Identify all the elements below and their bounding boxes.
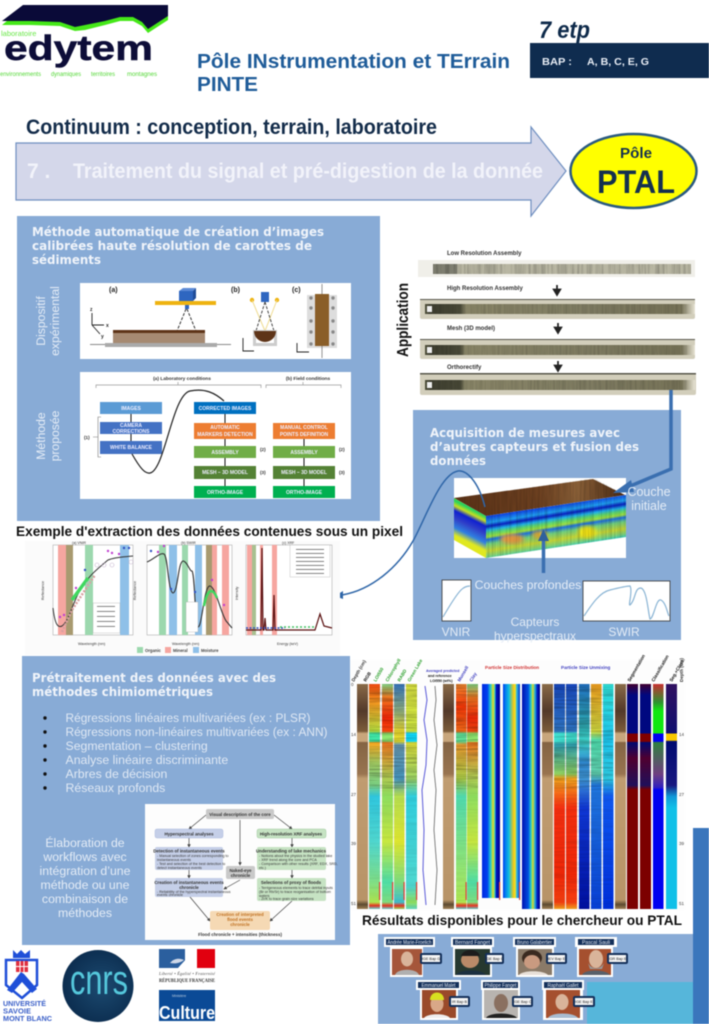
image: hyperspectral block: [454, 478, 626, 558]
chart: SWIR spectrum: Wavelength (nm): [172, 642, 199, 646]
log headers: Averaged predicted: [426, 669, 459, 673]
person 4: IGR Bap E: [608, 957, 627, 961]
label: couche initiale: [627, 485, 671, 513]
log headers: Seg.+Class.: [669, 658, 686, 682]
logo: edytem: laboratoire: [1, 29, 36, 38]
person 7: Raphaël Gallet: [548, 983, 579, 989]
depth ticks: 51: [351, 901, 357, 906]
legend: band types: [137, 647, 219, 653]
diagram: workflow: (3): [339, 470, 345, 475]
person 5: Emmanuel Malet: [422, 983, 456, 989]
diagram: workflow: IMAGES: [121, 406, 142, 412]
arrow: to deep layers: [538, 529, 549, 573]
depth ticks: 39: [679, 841, 685, 846]
log headers: and reference: [428, 674, 452, 678]
diagram: flood chronicle workflow: instantaneous events: [157, 858, 191, 862]
text: workflows: méthodes: [58, 906, 112, 920]
panel heading: [430, 426, 639, 468]
arrow: step banner: Traitement du signal et pré-digestion de la donnée: [73, 160, 543, 183]
logo: edytem: territoires: [91, 71, 116, 78]
logo: ministere de la culture: [159, 990, 215, 1023]
diagram: experimental setup: [80, 283, 351, 359]
depth ticks: [351, 682, 685, 906]
list: methods: Régressions non-linéaires multivariées (ex : ANN): [66, 725, 328, 739]
diagram: flood chronicle workflow: chronicle: [231, 873, 251, 878]
chart: SWIR: [583, 581, 670, 639]
diagram: flood chronicle workflow: events chronicle: [157, 893, 183, 897]
diagram: flood chronicle workflow: - Comparison with other results (XRF, EDX, SRD,: [259, 862, 338, 866]
diagram: workflow: CAMERA: [120, 423, 142, 429]
diagram: experimental setup: (a): [109, 287, 118, 294]
chart: SWIR spectrum: [133, 541, 232, 646]
log headers: RABD: [397, 668, 408, 682]
label: capteurs hyperspectraux: Capteurs: [511, 615, 559, 629]
chart: SWIR spectrum: (b) SWIR: [181, 541, 196, 545]
list: methods: Arbres de décision: [66, 767, 168, 781]
classification maps: [627, 684, 677, 909]
log headers: Chlorophyll: [385, 658, 402, 682]
list: methods: Segmentation – clustering: [66, 739, 208, 753]
panel: methode automatique: [17, 216, 380, 521]
BAP banner: A, B, C, E, G: [587, 56, 649, 68]
diagram: flood chronicle workflow: - Test and selection of the best detection to: [157, 862, 225, 866]
person 5: [416, 980, 470, 1020]
diagram: workflow: MARKERS DETECTION: [197, 432, 253, 438]
diagram: experimental setup: z: [90, 307, 93, 313]
panel heading: Prétraitement des données avec des: [32, 671, 276, 685]
diagram: flood chronicle workflow: - XRF trend along the core and PCA: [259, 858, 317, 862]
log headers: Particle Size Unmixing: [561, 665, 610, 670]
depth ticks: 14: [679, 732, 685, 737]
label: application: Application: [395, 283, 412, 357]
log headers: Munsell: [457, 665, 469, 682]
person 2: [451, 937, 504, 977]
panel heading: [32, 671, 276, 699]
chart: XRF spectrum: (c) XRF: [282, 541, 295, 545]
diagram: flood chronicle workflow: Hyperspectral analyses: [164, 832, 214, 836]
diagram: workflow: ORTHO-IMAGE: [286, 490, 323, 496]
diagram: workflow: ASSEMBLY: [211, 450, 239, 456]
text: workflows: combinaison de: [42, 892, 128, 906]
logo: ministere de la culture: Culture: [159, 1003, 215, 1023]
diagram: flood chronicle workflow: High-resolution XRF analyses: [260, 832, 323, 836]
panel heading: Acquisition de mesures avec: [430, 426, 620, 440]
panel: team: [378, 934, 693, 1024]
person 2: IGE Bap C: [485, 957, 504, 961]
logo: universite savoie mont blanc: SAVOIE: [3, 1008, 31, 1016]
diagram: flood chronicle workflow: Naked-eye: [230, 868, 252, 873]
log headers: Depth (cm): [679, 658, 684, 682]
diagram: workflow: ASSEMBLY: [290, 450, 318, 456]
diagram: workflow: POINTS DEFINITION: [280, 432, 329, 438]
diagram: flood chronicle workflow: Understanding of lake mechanics: [256, 848, 327, 854]
diagram: flood chronicle workflow: Flood chronicle + intensities (thickness): [198, 932, 282, 937]
badge: pole PTAL: [570, 134, 696, 208]
person 1: Andrée Marie-Froelich: [388, 940, 432, 946]
chart: multi-proxy core logs: [350, 654, 686, 910]
person 3: IEV Bap E: [548, 957, 566, 961]
arrow: to initial layer: [628, 390, 671, 487]
label: dispositif experimental: Dispositif: [34, 296, 48, 346]
log headers: LOI550: [373, 666, 385, 682]
edge marks: [379, 882, 520, 900]
logo: republique francaise: [158, 949, 216, 984]
chart: VNIR: [442, 580, 471, 639]
diagram: workflow: [80, 372, 351, 499]
text: workflows: méthode ou une: [41, 878, 130, 892]
heading: pixel extraction: Exemple d'extraction des données contenues sous un pixel: [16, 523, 403, 539]
depth ticks: 0: [351, 682, 354, 687]
list: methods: Régressions linéaires multivariées (ex : PLSR): [66, 711, 310, 725]
diagram: flood chronicle workflow: etc.): [259, 866, 266, 870]
text: workflows: Élaboration de: [45, 835, 125, 850]
diagram: flood chronicle workflow: detect instantaneous events: [157, 866, 202, 870]
diagram: flood chronicle workflow: chronicle: [230, 922, 250, 927]
label: capteurs hyperspectraux: [494, 615, 576, 643]
diagram: experimental setup: y: [101, 334, 104, 340]
person 1: IGE Bap G: [422, 957, 440, 961]
diagram: flood chronicle workflow: waters: [259, 894, 270, 898]
diagram: flood chronicle workflow: Creation of instantaneous events: [154, 880, 224, 885]
chart: VNIR spectrum: Wavelength (nm): [78, 642, 105, 646]
text: workflows: intégration d’une: [40, 864, 131, 878]
image: core assembly stages: Mesh (3D model): [447, 326, 495, 332]
decorative side bar: [693, 828, 709, 1024]
BAP banner: BAP :: [542, 56, 572, 68]
chart: SWIR spectrum: Reflectance: [133, 581, 137, 600]
title: [197, 50, 510, 96]
chart: XRF spectrum: Energy (keV): [277, 642, 298, 646]
depth ticks: 27: [679, 792, 685, 797]
chart: XRF spectrum: Intensity: [235, 586, 239, 600]
diagram: workflow: (b) Field conditions: [286, 376, 330, 382]
person 6: [481, 980, 533, 1020]
diagram: workflow: (a) Laboratory conditions: [153, 376, 211, 382]
logo: universite savoie mont blanc: [3, 950, 52, 1023]
badge: pole PTAL: PTAL: [597, 164, 675, 200]
diagram: flood chronicle workflow: (Br or Rb/Sr) to trace reoganisation of bottom: [259, 890, 331, 894]
diagram: flood chronicle workflow: [145, 804, 338, 940]
list: methods: Analyse linéaire discriminante: [66, 753, 228, 767]
logo: universite savoie mont blanc: MONT BLANC: [3, 1016, 52, 1023]
diagram: flood chronicle workflow: - Notions about the physics in the studied lake: [259, 854, 332, 858]
depth ticks: 51: [679, 901, 685, 906]
diagram: workflow: AUTOMATIC: [210, 425, 240, 431]
image: core assembly stages: High Resolution Assembly: [447, 286, 523, 292]
label: methode proposee: proposée: [48, 410, 62, 461]
diagram: workflow: (2): [339, 447, 345, 452]
panel: pretraitement: [22, 656, 350, 945]
diagram: flood chronicle workflow: Visual description of the core: [209, 812, 271, 817]
depth ticks: 27: [351, 792, 357, 797]
label: dispositif experimental: [34, 286, 62, 356]
diagram: flood chronicle workflow: - Terrigeneous elements to trace detrital inputs: [259, 886, 333, 890]
chart: SWIR: SWIR: [608, 625, 640, 639]
logo: ministere de la culture: Ministère: [172, 994, 186, 998]
caption: results: Résultats disponibles pour le chercheur ou PTAL: [362, 912, 682, 928]
log headers: LOI550 (wt%): [430, 679, 453, 683]
diagram: workflow: MESH – 3D MODEL: [281, 470, 327, 476]
person 7: [542, 980, 595, 1020]
diagram: workflow: CORRECTIONS: [113, 429, 150, 435]
panel heading: Méthode automatique de création d’images: [32, 225, 324, 239]
badge: pole PTAL: Pôle: [620, 145, 652, 162]
panel heading: calibrées haute résolution de carottes de: [32, 239, 312, 253]
legend: band types: Mineral: [173, 648, 188, 653]
legend: band types: Organic: [145, 648, 161, 653]
logo: cnrs: cnrs: [70, 956, 128, 1003]
diagram: flood chronicle workflow: Selections of proxy of floods: [261, 880, 322, 885]
diagram: experimental setup: (c): [292, 287, 301, 294]
diagram: flood chronicle workflow: Creation of interpreted: [216, 912, 264, 917]
label: dispositif experimental: expérimental: [48, 286, 62, 356]
label: capteurs hyperspectraux: hyperspectraux: [494, 629, 576, 643]
chart: VNIR: VNIR: [442, 625, 471, 639]
person 6: Philippe Fanget: [484, 983, 517, 989]
label: couches profondes: Couches profondes: [475, 578, 581, 592]
diagram: flood chronicle workflow: - Manual selection of zones corresponding to: [157, 854, 229, 858]
image: core assembly stages: Orthorectify: [447, 365, 482, 371]
log headers: Clay: [469, 671, 478, 682]
panel heading: d’autres capteurs et fusion des: [430, 440, 639, 454]
texture overlay: [369, 684, 613, 909]
diagram: workflow: (2): [260, 447, 266, 452]
staff count: 7 etp: [539, 17, 590, 44]
chart group: spectra: [25, 541, 340, 655]
diagram: workflow: WHITE BALANCE: [110, 445, 153, 451]
logo: edytem: [0, 5, 168, 78]
panel heading: sédiments: [32, 253, 101, 267]
heading: continuum: Continuum : conception, terrain, laboratoire: [26, 116, 437, 139]
label: couche initiale: Couche: [627, 485, 671, 499]
logo: cnrs: [62, 950, 134, 1022]
diagram: workflow: (3): [260, 470, 266, 475]
diagram: workflow: (1): [84, 435, 90, 440]
BAP banner: [530, 43, 709, 78]
log headers: Depth (cm): [351, 659, 367, 682]
logo: edytem: dynamiques: [51, 71, 82, 78]
logo: edytem: montagnes: [127, 71, 158, 78]
chart: VNIR spectrum: Reflectance: [41, 581, 45, 600]
panel: acquisition: [413, 390, 681, 643]
title: Pôle INstrumentation et TErrain: [197, 50, 510, 73]
log headers: Segmentation: [627, 654, 646, 682]
diagram: flood chronicle workflow: Detection of instantaneous events: [153, 848, 225, 854]
diagram: flood chronicle workflow: chronicle: [179, 885, 199, 890]
arrow: curve to pixel spectra: [335, 471, 485, 599]
logo: republique francaise: Liberté • Égalité • Fraternité: [158, 971, 216, 976]
person 2: Bernard Fanget: [455, 940, 491, 946]
diagram: experimental setup: (b): [231, 287, 240, 294]
particle size distribution: [482, 684, 540, 909]
person 3: Bruno Galabertier: [517, 940, 552, 946]
log headers: Particle Size Distribution: [485, 665, 539, 670]
hyperspectral columns: [369, 684, 478, 909]
image: core assembly stages: Low Resolution Assembly: [447, 251, 522, 257]
list: methods: [43, 711, 328, 795]
person 6: IGE Bap C: [513, 1000, 532, 1004]
core photo columns: [357, 684, 626, 909]
label: methode proposee: Méthode: [34, 412, 48, 460]
label: couche initiale: initiale: [631, 499, 667, 513]
arrow: step banner: 7 .: [27, 160, 50, 183]
panel heading: [32, 225, 324, 267]
diagram: workflow: CORRECTED IMAGES: [199, 406, 252, 412]
diagram: flood chronicle workflow: - Zr/K to trace grain size variations: [259, 897, 314, 901]
chart: VNIR spectrum: [41, 541, 133, 646]
arrow: step banner: [16, 127, 566, 216]
arrowhead: initial layer: [613, 480, 634, 493]
log headers: RGB: [363, 671, 372, 682]
logo: republique francaise: RÉPUBLIQUE FRANÇAISE: [159, 978, 215, 984]
text: workflows: workflows avec: [42, 850, 127, 864]
depth ticks: 14: [351, 732, 357, 737]
person 3: [513, 937, 567, 977]
depth profile: [422, 686, 437, 905]
label: methode proposee: [34, 410, 62, 461]
diagram: flood chronicle workflow: flood events: [227, 917, 253, 922]
diagram: experimental setup: x: [106, 323, 109, 329]
chart: XRF spectrum: [235, 541, 332, 646]
title: PINTE: [197, 73, 258, 96]
text: workflows: [40, 835, 131, 920]
log headers: Classification: [651, 654, 670, 682]
person 7: IGE Bap E: [575, 1000, 593, 1004]
logo: edytem: edytem: [4, 29, 153, 68]
log headers: [351, 654, 686, 683]
panel heading: méthodes chimiométriques: [32, 685, 213, 699]
person 5: IR Bap B: [452, 1000, 468, 1004]
person 4: Pascal Sauli: [582, 940, 610, 946]
depth ticks: 39: [351, 841, 357, 846]
image: core assembly stages: [418, 251, 696, 395]
diagram: workflow: ORTHO-IMAGE: [207, 490, 244, 496]
chart: VNIR spectrum: (a) VNIR: [72, 541, 86, 545]
person 4: [575, 937, 628, 977]
log headers: Green Lake: [407, 658, 424, 682]
diagram: workflow: MANUAL CONTROL: [280, 425, 328, 431]
logo: universite savoie mont blanc: UNIVERSITÉ: [3, 999, 46, 1008]
particle size unmixing: [554, 684, 614, 909]
list: methods: Réseaux profonds: [66, 781, 165, 795]
diagram: workflow: MESH – 3D MODEL: [202, 470, 248, 476]
person 1: [384, 937, 442, 977]
panel heading: données: [430, 454, 486, 468]
diagram: flood chronicle workflow: - Reliability of the hyperspectral instantaneous: [157, 890, 231, 894]
legend: band types: Moisture: [201, 648, 219, 653]
logo: edytem: environnements: [0, 71, 42, 78]
